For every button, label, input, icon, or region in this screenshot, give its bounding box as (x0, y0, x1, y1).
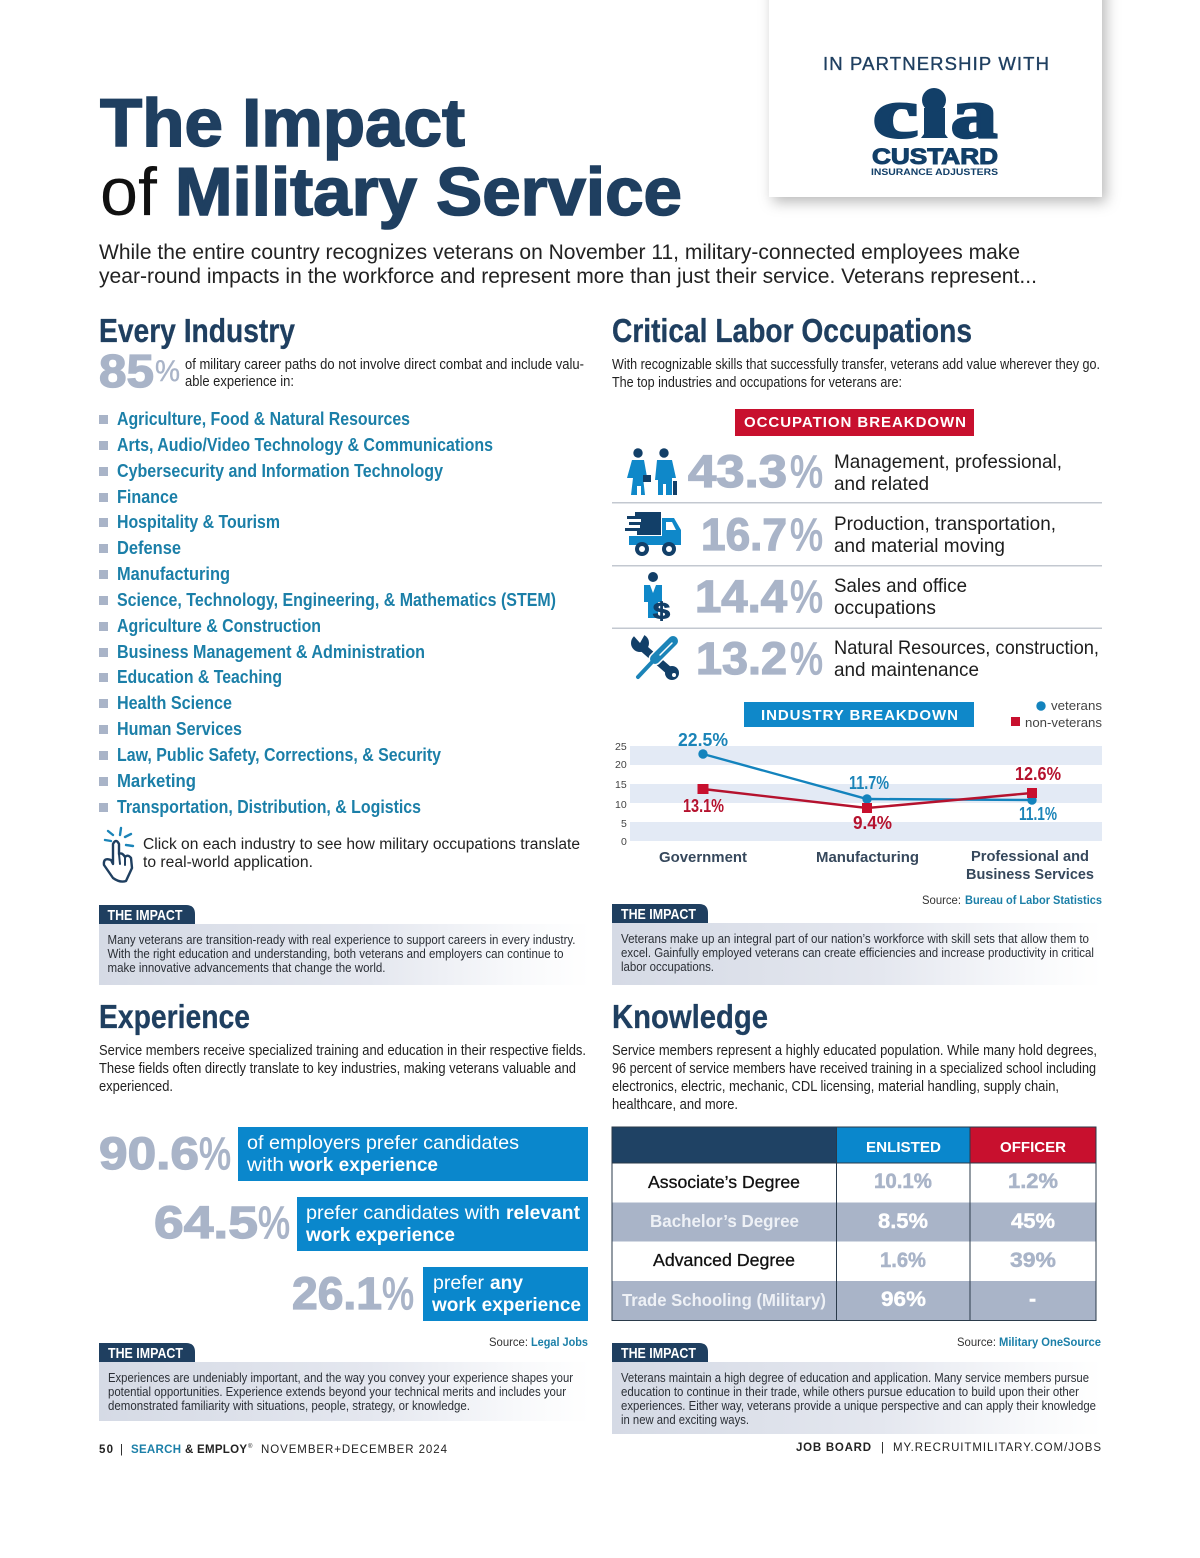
stat bar: 64.5 percent: relevant (506, 1202, 580, 1224)
logo: cia custard: CUSTARD (872, 144, 998, 169)
occupation row: management: Management, professional, (834, 451, 1062, 473)
table: education by rank: 45% (1011, 1209, 1055, 1233)
industry breakdown banner: INDUSTRY BREAKDOWN (761, 707, 958, 724)
callout: the impact, industry: THE IMPACT (108, 907, 182, 924)
table: education by rank: Bachelor’s Degree (650, 1211, 799, 1231)
section intro: The top industries and occupations for veterans are: (612, 375, 902, 391)
industry list: Science, Technology, Engineering, & Mathematics (STEM) (117, 590, 556, 610)
logo: cia custard: c (873, 76, 918, 153)
industry list: Marketing (117, 771, 196, 791)
partner box (769, 0, 1102, 197)
section intro: Service members represent a highly educated population. While many hold degrees, (612, 1043, 1097, 1059)
industry list (99, 409, 556, 817)
panel: experience (99, 998, 590, 1421)
stat: 85 percent: able experience in: (185, 374, 294, 390)
callout: the impact, knowledge: THE IMPACT (621, 1345, 696, 1362)
callout: the impact, occupations: Veterans make up an integral part of our nation’s workforce with skill sets that allow them to (621, 931, 1089, 946)
occupation row: management: and related (834, 473, 929, 495)
icon: tools (631, 634, 679, 680)
icon: salesperson: $ (653, 598, 670, 624)
callout: the impact, experience: potential opportunities. Experience extends beyond your technical merits and includes your (108, 1384, 567, 1399)
callout: the impact, knowledge (612, 1343, 1102, 1434)
icon: truck (625, 512, 681, 556)
occupation breakdown banner (735, 409, 974, 436)
heading: Every Industry (99, 312, 296, 349)
stat bar: 90.6 percent: of employers prefer candidates (247, 1132, 519, 1154)
occupation row: sales: Sales and office (834, 575, 967, 597)
table: education by rank: 10.1% (874, 1169, 932, 1193)
section intro: 96 percent of service members have received training in a specialized school including (612, 1061, 1096, 1077)
table: education by rank: Advanced Degree (653, 1250, 795, 1270)
callout: the impact, experience: demonstrated familiarity with situations, people, strategy, or knowledge. (108, 1398, 470, 1413)
section intro: healthcare, and more. (612, 1097, 738, 1113)
panel: critical labor occupations (612, 312, 1102, 985)
footer: right: JOB BOARD (796, 1442, 871, 1454)
footer: left: | (120, 1444, 123, 1456)
occupation row: sales: 14.4 (695, 571, 787, 622)
logo: cia custard: a (951, 76, 997, 153)
section intro (99, 1043, 586, 1095)
table: education by rank: Associate’s Degree (648, 1172, 800, 1192)
stat: 85 percent: 85 (99, 345, 154, 397)
heading: Experience (99, 998, 250, 1035)
industry list: Agriculture, Food & Natural Resources (117, 409, 410, 429)
callout: the impact, experience: THE IMPACT (108, 1345, 183, 1362)
stat: 85 percent (99, 345, 584, 397)
heading: Critical Labor Occupations (612, 312, 972, 349)
occupation row: production: 16.7 (701, 509, 787, 560)
line chart: industry breakdown: 12.6% (1015, 764, 1061, 784)
industry list: Agriculture & Construction (117, 616, 321, 636)
table: education by rank: - (1029, 1287, 1036, 1311)
source: bureau of labor statistics: Source: (922, 893, 961, 907)
partnership label: IN PARTNERSHIP WITH (823, 53, 1049, 74)
title: of (100, 154, 157, 230)
stat bar: 90.6 percent (99, 1127, 588, 1181)
icon: pointing hand (104, 828, 133, 882)
industry list: Education & Teaching (117, 667, 282, 687)
table: education by rank: Trade Schooling (Military) (622, 1290, 826, 1310)
footer: left: 50 (99, 1444, 113, 1456)
industry list: Arts, Audio/Video Technology & Communications (117, 435, 493, 455)
callout: the impact, experience (99, 1343, 590, 1421)
title: Military Service (175, 154, 682, 230)
table: education by rank: 8.5% (878, 1209, 928, 1233)
callout: the impact, occupations: excel. Gainfully employed veterans can create efficiencies and increase productivity in critical (621, 945, 1094, 960)
source: legal jobs (489, 1335, 588, 1349)
table: education by rank: 39% (1010, 1248, 1056, 1272)
footer: left: & EMPLOY (185, 1444, 247, 1456)
heading: Knowledge (612, 998, 768, 1035)
stat bar: 64.5 percent: prefer candidates with (306, 1202, 500, 1224)
source: bureau of labor statistics: Bureau of Labor Statistics (965, 893, 1102, 907)
occupation row: production: % (790, 509, 823, 560)
title (100, 85, 682, 230)
stat bar: 90.6 percent: with (246, 1154, 284, 1176)
footer: right: MY.RECRUITMILITARY.COM/JOBS (893, 1442, 1101, 1454)
line chart: industry breakdown: 13.1% (683, 796, 724, 816)
occupation row: natural resources (631, 633, 1099, 684)
panel: knowledge (612, 998, 1102, 1434)
callout: the impact, industry: Many veterans are transition-ready with real experience to support careers in every industry. (108, 932, 576, 947)
occupation row: sales: occupations (834, 597, 936, 619)
line chart: industry breakdown: 15 (615, 779, 627, 791)
industry list: Cybersecurity and Information Technology (117, 461, 443, 481)
stat bar: 26.1 percent: work experience (431, 1294, 581, 1316)
line chart: industry breakdown (615, 730, 1102, 883)
line chart: industry breakdown: 11.7% (849, 773, 889, 793)
panel: every industry (99, 312, 590, 985)
footer: left: SEARCH (131, 1444, 181, 1456)
section intro (612, 1043, 1097, 1113)
stat bar: 26.1 percent: 26.1 (292, 1268, 382, 1319)
logo: cia custard: INSURANCE ADJUSTERS (871, 167, 998, 178)
stat bar: 64.5 percent (154, 1197, 588, 1251)
section intro: electronics, electric, mechanic, CDL licensing, material handling, supply chain, (612, 1079, 1059, 1095)
occupation row: natural resources: Natural Resources, construction, (834, 637, 1099, 659)
line chart: industry breakdown: Government (659, 849, 747, 866)
icon: salesperson (644, 572, 670, 624)
legend (1011, 698, 1102, 730)
stat bar: 90.6 percent: 90.6 (99, 1128, 199, 1179)
section intro: These fields often directly translate to key industries, making veterans valuable and (99, 1061, 576, 1077)
intro text: year-round impacts in the workforce and represent more than just their service. Veterans represent... (99, 265, 1037, 288)
industry list: Transportation, Distribution, & Logistics (117, 797, 421, 817)
industry list: Hospitality & Tourism (117, 512, 280, 532)
source: military onesource: Military OneSource (999, 1335, 1101, 1349)
stat bar: 26.1 percent (292, 1267, 588, 1321)
callout: the impact, occupations (612, 904, 1102, 985)
footer: left: ® (248, 1443, 253, 1450)
table: education by rank: ENLISTED (866, 1139, 941, 1156)
section intro (612, 357, 1100, 391)
line chart: industry breakdown: Manufacturing (816, 849, 919, 866)
occupation row: production: and material moving (834, 535, 1005, 557)
title: The Impact (100, 85, 465, 161)
footer: right (796, 1442, 1101, 1454)
footer: left: NOVEMBER+DECEMBER 2024 (261, 1444, 448, 1456)
stat bar: 26.1 percent: any (490, 1272, 523, 1294)
occupation row: management (627, 446, 1062, 497)
line chart: industry breakdown: Business Services (966, 866, 1094, 883)
section intro: experienced. (99, 1079, 173, 1095)
source: military onesource (957, 1335, 1101, 1349)
stat: 85 percent: % (155, 355, 180, 388)
occupation row: production: Production, transportation, (834, 513, 1056, 535)
occupation row: natural resources: 13.2 (696, 633, 787, 684)
occupation row: sales: % (790, 571, 823, 622)
callout: the impact, industry: make innovative advancements that change the world. (108, 960, 386, 975)
click note (143, 836, 580, 871)
industry list: Manufacturing (117, 564, 230, 584)
table: education by rank: OFFICER (1000, 1139, 1066, 1156)
callout: the impact, occupations: THE IMPACT (621, 906, 696, 923)
stat bar: 90.6 percent: % (199, 1128, 231, 1179)
line chart: industry breakdown: 11.1% (1019, 804, 1057, 824)
line chart: industry breakdown: 22.5% (678, 730, 728, 750)
callout: the impact, knowledge: in new and exciting ways. (621, 1412, 749, 1427)
callout: the impact, knowledge: experiences. Either way, veterans provide a unique perspective and can apply their knowledge (621, 1398, 1096, 1413)
table: education by rank (612, 1127, 1096, 1320)
stat bar: 64.5 percent: % (258, 1197, 290, 1248)
callout: the impact, knowledge: education to continue in their trade, while others pursue education to build upon their other (621, 1384, 1080, 1399)
industry list: Finance (117, 487, 178, 507)
industry list: Defense (117, 538, 181, 558)
line chart: industry breakdown: 20 (615, 759, 627, 771)
occupation row: natural resources: % (790, 633, 823, 684)
occupation row: sales (644, 571, 967, 624)
industry list: Business Management & Administration (117, 642, 425, 662)
industry breakdown banner (744, 702, 974, 727)
stat bar: 64.5 percent: work experience (305, 1224, 455, 1246)
stat: 85 percent: of military career paths do not involve direct combat and include valu- (185, 357, 584, 373)
callout: the impact, industry: With the right education and understanding, both veterans and employers can continue to (108, 946, 564, 961)
stat bar: 64.5 percent: 64.5 (154, 1197, 258, 1248)
occupation row: management: % (790, 446, 823, 497)
logo: cia custard (871, 76, 998, 178)
section intro: Service members receive specialized training and education in their respective fields. (99, 1043, 586, 1059)
footer: left (99, 1443, 448, 1456)
stat bar: 26.1 percent: prefer (433, 1272, 484, 1294)
occupation row: natural resources: and maintenance (834, 659, 979, 681)
stat bar: 26.1 percent: % (382, 1268, 414, 1319)
line chart: industry breakdown: 9.4% (853, 813, 892, 833)
line chart: industry breakdown: 10 (615, 799, 627, 811)
intro text (99, 241, 1037, 288)
callout: the impact, experience: Experiences are undeniably important, and the way you convey your experience shapes your (108, 1370, 574, 1385)
occupation breakdown banner: OCCUPATION BREAKDOWN (744, 414, 966, 431)
line chart: industry breakdown: Professional and (971, 848, 1089, 865)
industry list: Health Science (117, 693, 232, 713)
occupation row: production (625, 509, 1056, 560)
line chart: industry breakdown: 5 (621, 818, 627, 830)
callout: the impact, industry (99, 905, 590, 985)
stat bar: 90.6 percent: work experience (288, 1154, 438, 1176)
legend: veterans (1051, 698, 1102, 713)
industry list: Human Services (117, 719, 242, 739)
table: education by rank: 1.2% (1008, 1169, 1058, 1193)
occupation row: management: 43.3 (688, 446, 787, 497)
click note: to real-world application. (143, 854, 313, 871)
source: legal jobs: Source: (489, 1335, 528, 1349)
source: military onesource: Source: (957, 1335, 996, 1349)
click note: Click on each industry to see how military occupations translate (143, 836, 580, 853)
line chart: industry breakdown: 25 (615, 741, 627, 753)
industry list: Law, Public Safety, Corrections, & Security (117, 745, 441, 765)
footer: right: | (881, 1442, 884, 1454)
legend: non-veterans (1025, 715, 1102, 730)
line chart: industry breakdown: 0 (621, 836, 627, 848)
callout: the impact, occupations: labor occupations. (621, 959, 714, 974)
table: education by rank: 96% (881, 1287, 926, 1311)
table: education by rank: 1.6% (880, 1248, 926, 1272)
section intro: With recognizable skills that successfully transfer, veterans add value wherever they go. (612, 357, 1100, 373)
icon: business people (627, 448, 677, 495)
source: legal jobs: Legal Jobs (531, 1335, 588, 1349)
intro text: While the entire country recognizes veterans on November 11, military-connected employees make (99, 241, 1020, 264)
callout: the impact, knowledge: Veterans maintain a high degree of education and application. Many service members pursue (621, 1370, 1089, 1385)
